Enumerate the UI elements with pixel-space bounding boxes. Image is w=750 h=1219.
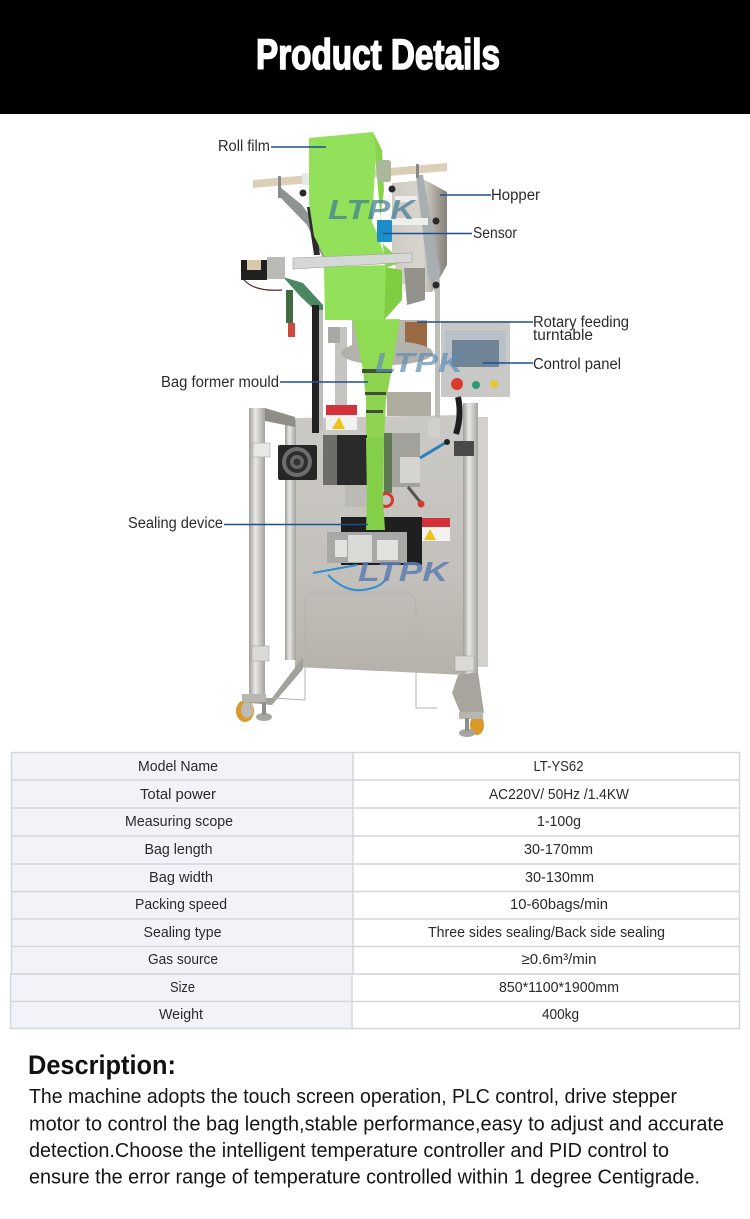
row: gas source: ≥0.6m³/min (522, 951, 596, 968)
turntable (341, 320, 433, 365)
watermark middle: LTPK (375, 347, 465, 378)
row: bag width (149, 869, 594, 886)
acrylic guard (273, 592, 437, 708)
row: weight (159, 1006, 579, 1023)
row: measuring scope: Measuring scope (125, 813, 233, 830)
title: Product Details (256, 31, 500, 79)
former cone (353, 319, 440, 440)
watermark bottom: LTPK (358, 556, 450, 587)
title banner (0, 0, 750, 114)
row: sealing type (144, 924, 665, 941)
row: weight: Weight (159, 1006, 204, 1023)
row: size: Size (170, 979, 195, 996)
row: total power: AC220V/ 50Hz /1.4KW (489, 786, 630, 803)
row: bag length (144, 841, 593, 858)
callout: rotary feeding turntable (417, 314, 629, 344)
description text: The machine adopts the touch screen operation, PLC control, drive stepper (29, 1085, 677, 1108)
back frame and panel (249, 403, 488, 713)
row: bag length: 30-170mm (524, 841, 593, 858)
hopper (392, 180, 447, 292)
row: packing speed (135, 896, 608, 913)
callout: hopper: Hopper (491, 187, 540, 204)
warning label upper (326, 405, 357, 430)
casters (236, 694, 484, 737)
control cable (456, 397, 460, 434)
control panel (441, 321, 510, 397)
lower film (324, 265, 402, 320)
cooling fan (278, 445, 317, 480)
callout: roll film (218, 138, 326, 155)
row: measuring scope (125, 813, 581, 830)
row: model name: LT-YS62 (534, 758, 584, 775)
callout: control panel (483, 356, 621, 373)
roll film (309, 132, 403, 268)
sealing film tube (366, 438, 385, 530)
callout: rotary feeding turntable: turntable (533, 327, 593, 344)
row: size: 850*1100*1900mm (499, 979, 619, 996)
description text (29, 1085, 724, 1188)
motor (241, 257, 295, 337)
description text: motor to control the bag length,stable performance,easy to adjust and accurate (29, 1112, 724, 1136)
specification table (10, 752, 740, 1029)
row: total power (140, 786, 630, 803)
sealing assembly (313, 433, 450, 590)
watermark top: LTPK (328, 194, 417, 225)
row: gas source (148, 951, 596, 968)
callout: hopper (440, 187, 540, 204)
callout: bag former mould: Bag former mould (161, 374, 279, 391)
support arm and rods (392, 175, 440, 430)
callout: control panel: Control panel (533, 356, 621, 373)
description heading: Description: (28, 1050, 176, 1080)
warning label lower (422, 518, 450, 541)
silver roller (293, 253, 412, 269)
top bracket and rear frame (280, 187, 347, 433)
row: packing speed: 10-60bags/min (510, 896, 608, 913)
callout: sealing device: Sealing device (128, 515, 223, 532)
row: packing speed: Packing speed (135, 896, 227, 913)
row: total power: Total power (140, 786, 216, 803)
description text: detection.Choose the intelligent temperature controller and PID control to (29, 1139, 669, 1162)
hopper lower section (404, 268, 425, 305)
row: sealing type: Sealing type (144, 924, 222, 941)
row: size (170, 979, 619, 996)
callout: sensor: Sensor (473, 225, 517, 242)
sensor (377, 220, 392, 242)
callout: roll film: Roll film (218, 138, 270, 155)
description text: ensure the error range of temperature controlled within 1 degree Centigrade. (29, 1166, 700, 1188)
row: bag width: Bag width (149, 869, 213, 886)
callout: sensor (383, 225, 517, 242)
row: gas source: Gas source (148, 951, 218, 968)
callout: rotary feeding turntable: Rotary feeding (533, 314, 629, 331)
row: sealing type: Three sides sealing/Back side sealing (428, 924, 665, 941)
row: measuring scope: 1-100g (537, 813, 581, 830)
row: model name (138, 758, 584, 775)
unwinding rod (253, 163, 447, 198)
row: bag width: 30-130mm (525, 869, 594, 886)
row: weight: 400kg (542, 1006, 579, 1023)
row: model name: Model Name (138, 758, 218, 775)
row: bag length: Bag length (144, 841, 212, 858)
machine photo (236, 132, 510, 737)
